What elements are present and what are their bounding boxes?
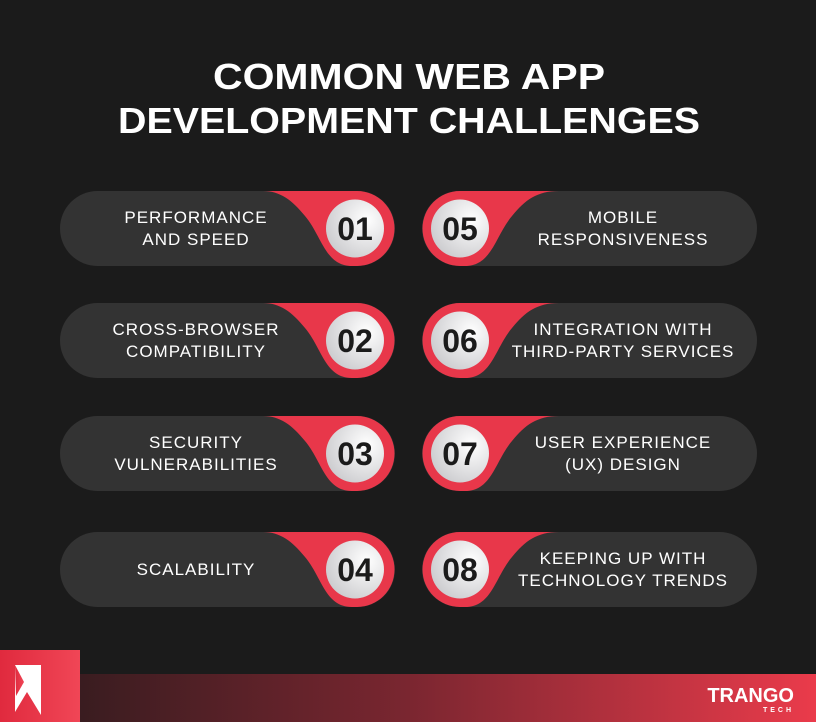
- item 05: [422, 191, 757, 266]
- title: [118, 56, 700, 141]
- item 05: 05: [442, 211, 478, 247]
- item 02: CROSS-BROWSER: [113, 320, 279, 339]
- item 03: [60, 416, 395, 491]
- item 02: 02: [337, 323, 373, 359]
- item 07: [422, 416, 757, 491]
- item 02: [60, 303, 395, 378]
- item 01: AND SPEED: [142, 230, 250, 249]
- item 04: SCALABILITY: [137, 560, 255, 579]
- title: DEVELOPMENT CHALLENGES: [118, 100, 700, 141]
- item 03: VULNERABILITIES: [114, 455, 278, 474]
- item 01: 01: [337, 211, 373, 247]
- item 06: [422, 303, 757, 378]
- item 03: 03: [337, 436, 373, 472]
- item 06: INTEGRATION WITH: [533, 320, 713, 339]
- item 05: RESPONSIVENESS: [538, 230, 708, 249]
- item 08: [422, 532, 757, 607]
- brand logo: TECH: [763, 707, 794, 714]
- item 04: [60, 532, 395, 607]
- title: COMMON WEB APP: [213, 56, 605, 97]
- item 06: 06: [442, 323, 478, 359]
- item 04: 04: [337, 552, 373, 588]
- item 07: 07: [442, 436, 478, 472]
- item 01: [60, 191, 395, 266]
- item 01: PERFORMANCE: [124, 208, 268, 227]
- item 05: MOBILE: [588, 208, 658, 227]
- item 08: TECHNOLOGY TRENDS: [518, 571, 728, 590]
- brand logo: TRANGO: [707, 685, 794, 707]
- logo square: [0, 650, 80, 722]
- item 02: COMPATIBILITY: [126, 342, 266, 361]
- item 08: KEEPING UP WITH: [540, 549, 706, 568]
- item 03: SECURITY: [149, 433, 243, 452]
- item 07: USER EXPERIENCE: [535, 433, 711, 452]
- footer bar: [0, 674, 816, 722]
- item 06: THIRD-PARTY SERVICES: [512, 342, 734, 361]
- item 08: 08: [442, 552, 478, 588]
- item 07: (UX) DESIGN: [565, 455, 681, 474]
